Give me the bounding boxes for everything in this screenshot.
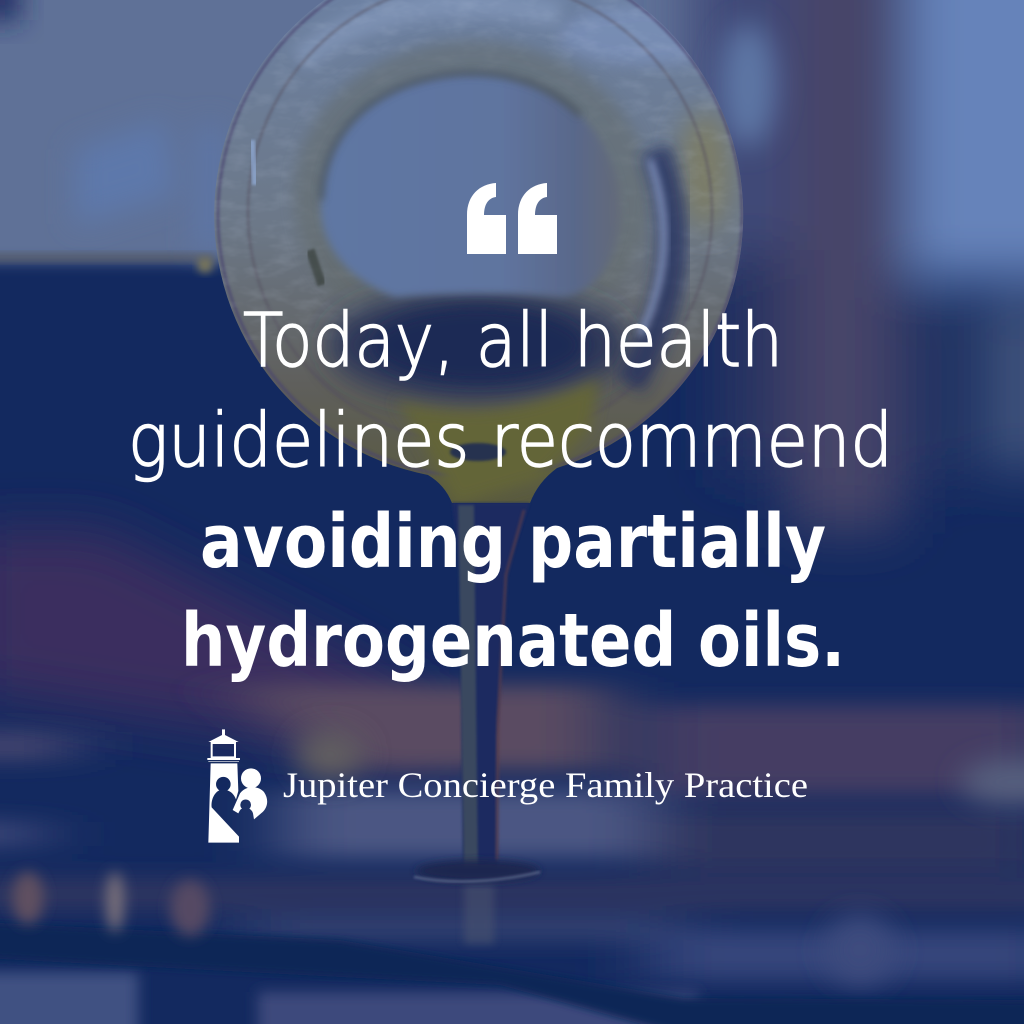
right side <box>690 0 1024 530</box>
reflections <box>12 872 210 936</box>
quote text: hydrogenated oils. <box>181 598 845 684</box>
logo: lighthouse with family <box>207 729 267 843</box>
icon: quotation mark <box>467 183 557 254</box>
glass bottle mouth <box>200 0 760 510</box>
logo wordmark: Jupiter Concierge Family Practice <box>283 765 808 805</box>
right side highlights <box>630 150 673 385</box>
quote text <box>128 298 893 684</box>
oil stream <box>414 503 540 944</box>
inner shoulder of the glass <box>292 36 650 296</box>
left purple diagonal <box>0 530 430 760</box>
lower middle bands <box>0 685 1024 980</box>
quote text: Today, all health <box>243 298 783 384</box>
quote text: guidelines recommend <box>128 398 893 484</box>
quote text: avoiding partially <box>200 499 826 585</box>
puddle <box>416 860 540 882</box>
dark inner rim <box>321 73 580 200</box>
bottle opening <box>321 73 621 297</box>
top wall <box>0 0 740 262</box>
